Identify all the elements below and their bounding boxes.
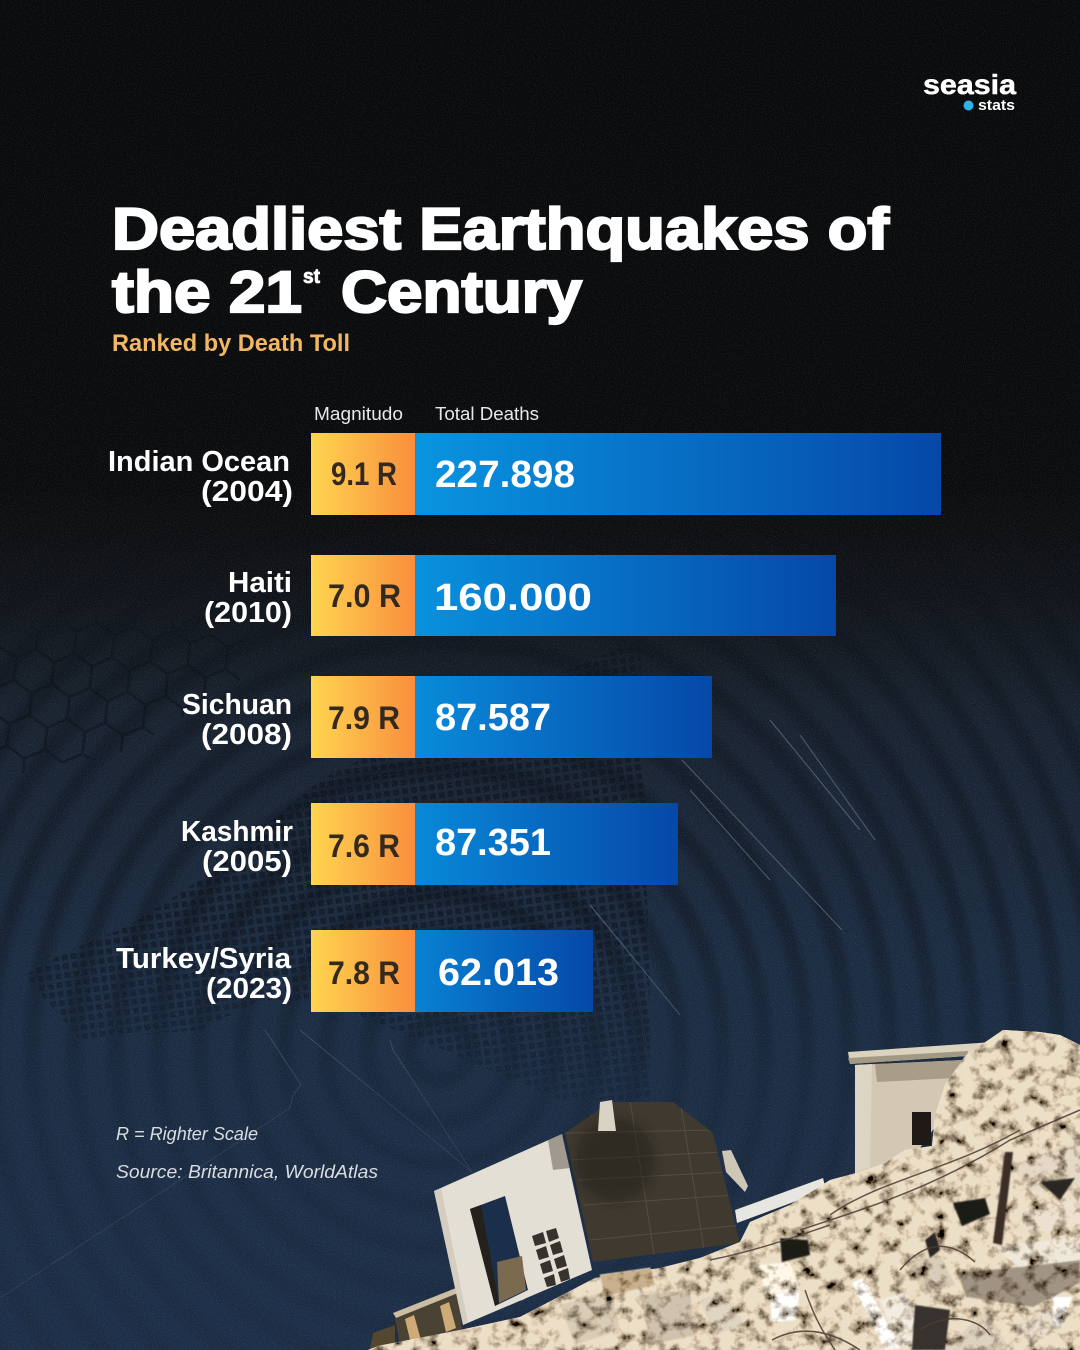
rear building: [848, 1042, 993, 1175]
label: Turkey/Syria: [116, 943, 292, 1005]
twisted rebar: [710, 1110, 1080, 1350]
bar: total deaths 87.587: [311, 676, 712, 758]
magnitude value: 7.0 R: [328, 578, 401, 614]
logo: seasia stats: stats: [978, 97, 1015, 114]
white tilted wall with door: [434, 1134, 592, 1325]
label: Indian Ocean: Indian Ocean: [108, 446, 290, 478]
tilted brick building face: [565, 1100, 742, 1262]
row: Indian Ocean 2004: [108, 433, 941, 515]
logo: seasia stats: [923, 69, 1016, 114]
label: Indian Ocean: (2004): [201, 476, 293, 508]
door opening: [470, 1196, 528, 1306]
footnote: source: Source: Britannica, WorldAtlas: [116, 1161, 378, 1182]
title: the 21: [112, 260, 302, 325]
rubble mass: [368, 1030, 1080, 1350]
title: [112, 197, 890, 325]
bar: total deaths 160.000: [311, 555, 836, 636]
magnitude value: 9.1 R: [331, 456, 397, 492]
white strip behind rubble: [735, 1178, 826, 1223]
column header: total deaths: Total Deaths: [435, 403, 539, 424]
label: Indian Ocean: [108, 446, 293, 508]
dark voids: [780, 1152, 1075, 1350]
row: Turkey/Syria 2023: [116, 930, 593, 1012]
magnitude value: 7.6 R: [328, 828, 400, 864]
row: Sichuan 2008: [182, 676, 712, 758]
deaths value: 160.000: [434, 577, 592, 619]
title: Deadliest Earthquakes of: [112, 197, 890, 262]
label: Sichuan: [182, 689, 292, 751]
deaths value: 227.898: [435, 454, 575, 496]
bar: total deaths 87.351: [311, 803, 678, 885]
label: Sichuan: Sichuan: [182, 689, 292, 721]
label: Haiti: Haiti: [228, 567, 292, 599]
subtitle: Ranked by Death Toll: [112, 330, 350, 357]
bar: total deaths 227.898: [311, 433, 941, 515]
logo: seasia stats: seasia: [923, 69, 1016, 100]
magnitude value: 7.9 R: [328, 700, 400, 736]
rusted rebar post: [993, 1152, 1013, 1245]
label: Turkey/Syria: Turkey/Syria: [116, 943, 292, 975]
label: Kashmir: [181, 816, 293, 878]
deaths value: 62.013: [438, 952, 559, 994]
label: Kashmir: Kashmir: [181, 816, 293, 848]
title: st: [303, 266, 320, 288]
label: Turkey/Syria: (2023): [206, 973, 292, 1005]
magnitude cell: 7.6 R: [311, 803, 415, 885]
magnitude value: 7.8 R: [328, 955, 400, 991]
deaths value: 87.587: [435, 697, 551, 739]
window: [912, 1112, 931, 1145]
illustration: collapsed buildings and rubble: [368, 1030, 1080, 1350]
footnote: scale: R = Righter Scale: [116, 1123, 258, 1144]
magnitude cell: 7.0 R: [311, 555, 415, 636]
label: Haiti: (2010): [204, 597, 292, 629]
glass block window: [532, 1228, 570, 1287]
concrete slabs and rocks: [560, 1140, 1080, 1350]
deaths value: 87.351: [435, 822, 551, 864]
small background building: [370, 1258, 524, 1350]
row: Haiti 2010: [204, 555, 836, 636]
magnitude cell: 7.8 R: [311, 930, 415, 1012]
row: Kashmir 2005: [181, 803, 678, 885]
label: Kashmir: (2005): [202, 846, 292, 878]
title: Century: [341, 260, 582, 325]
bar: total deaths 62.013: [311, 930, 593, 1012]
magnitude cell: 7.9 R: [311, 676, 415, 758]
falling concrete fragment: [722, 1150, 748, 1192]
label: Haiti: [204, 567, 292, 629]
label: Sichuan: (2008): [201, 719, 292, 751]
background: seismic rings, hexagons and dotted map: [0, 647, 1080, 1298]
column header: magnitude: Magnitudo: [314, 403, 403, 424]
magnitude cell: 9.1 R: [311, 433, 415, 515]
